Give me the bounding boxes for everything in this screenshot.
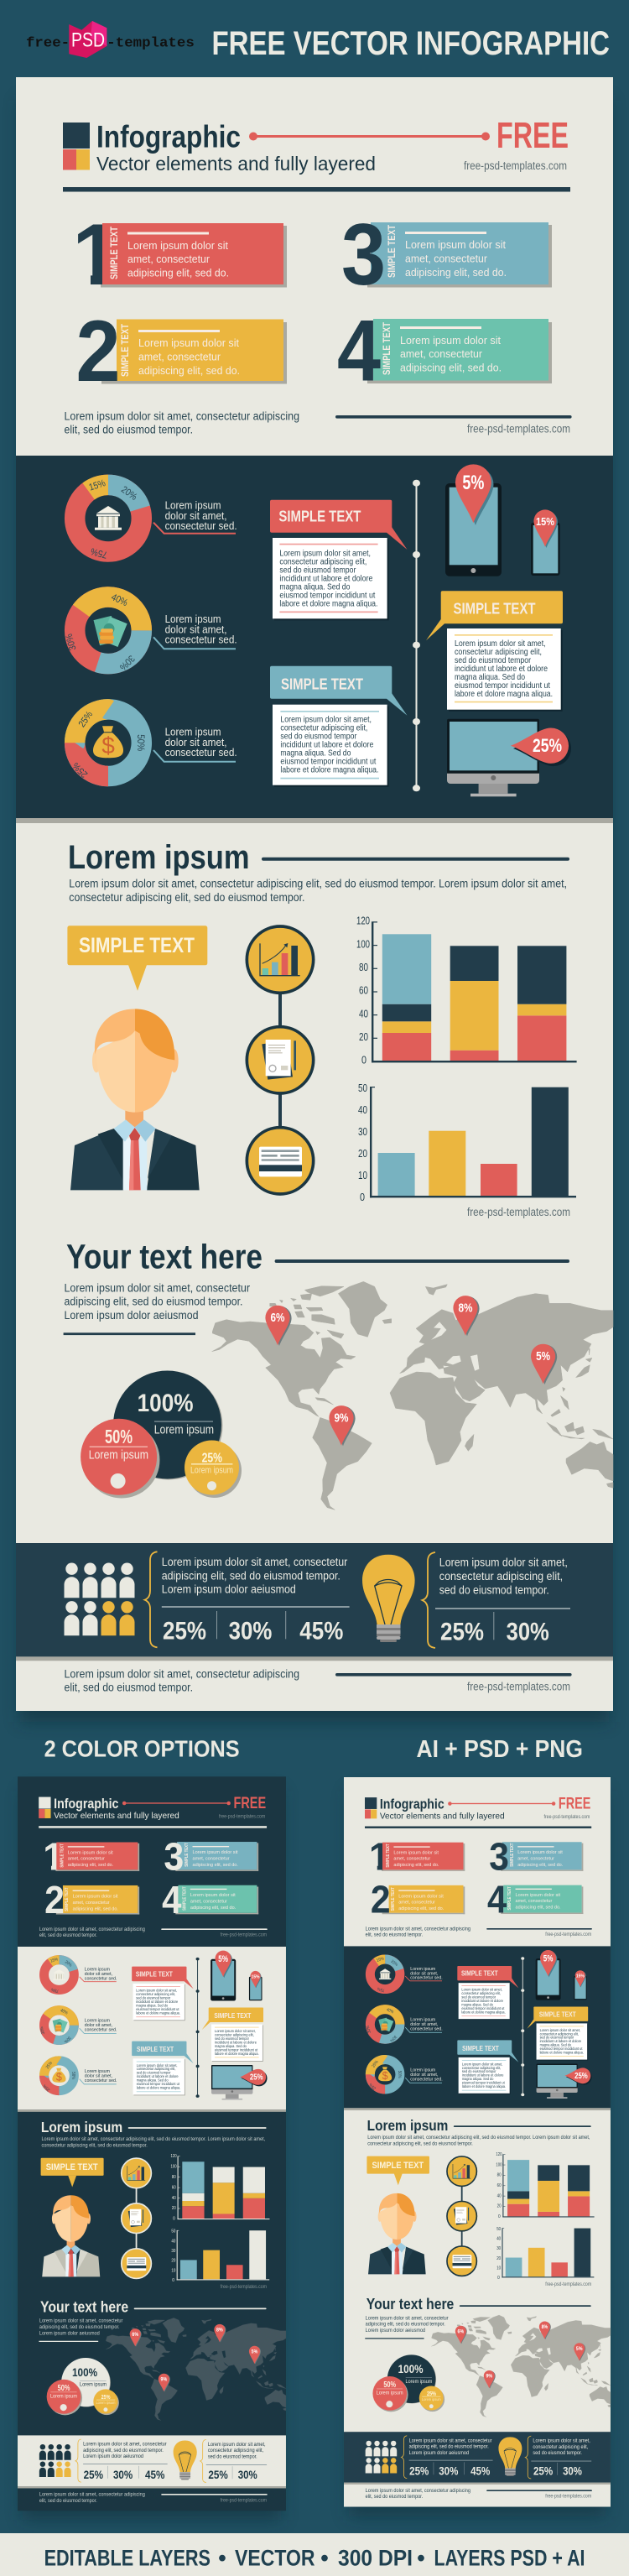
step 4: SIMPLE TEXT (382, 322, 392, 375)
stacked bar chart (356, 915, 577, 1066)
map pin: 5% (531, 1344, 557, 1384)
donut chart 2: 30% (65, 633, 78, 651)
text card: blue: sed do eiusmod tempor (280, 733, 357, 742)
icon: credit card (247, 1128, 314, 1194)
bar chart: 30 (358, 1125, 367, 1138)
map pin: 8% (453, 1296, 480, 1336)
bubble: 25%: 25% (202, 1451, 222, 1465)
section 1 footer: Lorem ipsum dolor sit amet, consectetur adipiscing (64, 409, 299, 423)
text card: yellow: incididunt ut labore et dolore (455, 665, 548, 674)
map description: adipiscing elit, sed do eiusmod tempor. (64, 1296, 243, 1308)
donut label 3: consectetur sed. (165, 746, 237, 759)
donut label 1: Lorem ipsum (165, 499, 221, 512)
page footer (64, 1667, 572, 1694)
icon: desktop monitor: 25% (533, 735, 562, 756)
website: free-psd-templates.com (464, 159, 567, 172)
panel: dark section (16, 456, 613, 823)
callout: yellow: SIMPLE TEXT (453, 600, 536, 618)
stats text right: sed do eiusmod tempor. (439, 1583, 549, 1596)
brace (423, 1552, 435, 1648)
speech bubble (67, 926, 207, 991)
stacked bar chart: 40 (359, 1007, 368, 1020)
icon: light bulb (362, 1555, 415, 1642)
map pin: 9% (329, 1405, 356, 1446)
bubble: 50%: 50% (105, 1426, 133, 1447)
donut chart 1: 15% (88, 478, 107, 493)
heading: AI + PSD + PNG: AI + PSD + PNG (416, 1736, 583, 1763)
map description: Lorem ipsum dolor sit amet, consectetur (64, 1281, 250, 1294)
step 3: Lorem ipsum dolor sit (405, 238, 506, 251)
donut label 1: dolor sit amet, (165, 509, 227, 522)
map pin: 6% (265, 1306, 292, 1346)
map pin: 6%: 6% (270, 1311, 285, 1325)
donut label 3: dolor sit amet, (165, 736, 227, 748)
footer band: • (417, 2546, 425, 2571)
step 2: adipiscing elit, sed do. (138, 364, 240, 377)
stats text left (162, 1556, 350, 1608)
text card: blue: eiusmod tempor incididunt ut (280, 758, 377, 767)
bubble chart (81, 1371, 242, 1499)
icon chain (247, 926, 314, 1194)
page footer: Lorem ipsum dolor sit amet, consectetur adipiscing (64, 1667, 299, 1680)
donut chart 2 (61, 584, 155, 677)
label: FREE: FREE (496, 115, 569, 156)
step 3: adipiscing elit, sed do. (405, 266, 507, 279)
donut label 2 (153, 613, 237, 649)
icon: phone: 15% (536, 516, 554, 528)
thumbnail: light colour option (344, 1777, 611, 2507)
footer band: LAYERS PSD + AI (434, 2546, 585, 2571)
step 1: Lorem ipsum dolor sit (127, 239, 228, 252)
callout: yellow (426, 591, 563, 640)
step 2 (75, 303, 287, 400)
donut chart 2: 30% (117, 653, 136, 672)
bar chart: 10 (358, 1169, 367, 1181)
bubble: 25% (185, 1440, 242, 1498)
bar chart: 40 (358, 1103, 367, 1116)
bubble: 100%: 100% (138, 1390, 194, 1417)
text card: red: eiusmod tempor incididunt ut (279, 591, 376, 600)
donut chart 3: 50% (135, 734, 145, 751)
bubble: 100%: Lorem ipsum (154, 1422, 214, 1437)
step 4: amet, consectetur (400, 347, 483, 360)
icon: tablet: 5% (462, 472, 484, 494)
map pin: 8%: 8% (458, 1301, 473, 1316)
stacked bar chart: 60 (359, 983, 368, 997)
text card: red: Lorem ipsum dolor sit amet, (279, 549, 371, 558)
bubble: 25%: Lorem ipsum (190, 1465, 233, 1475)
text card: red: sed do eiusmod tempor (279, 566, 356, 575)
stats text right: Lorem ipsum dolor sit amet, (439, 1557, 568, 1569)
step 1: 1 (72, 206, 121, 304)
intro paragraph: Lorem ipsum dolor sit amet, consectetur adipiscing elit, sed do eiusmod tempor. Lorem ipsum dolor sit amet, (69, 877, 567, 889)
text card: yellow (447, 628, 563, 712)
donut chart 3 (71, 709, 145, 780)
step 2: 2 (75, 303, 121, 400)
step 2: Lorem ipsum dolor sit (138, 336, 239, 349)
footer band (0, 2533, 629, 2576)
heading: Lorem ipsum: Lorem ipsum (68, 839, 250, 876)
bar chart (358, 1082, 576, 1203)
step 1: amet, consectetur (127, 253, 211, 265)
thumbnail: dark colour option (18, 1776, 286, 2511)
step 1 (72, 206, 287, 304)
icon: money bag: $ (101, 733, 115, 759)
heading: Your text here (66, 1238, 569, 1276)
page footer: free-psd-templates.com (467, 1681, 570, 1693)
page footer: elit, sed do eiusmod tempor. (64, 1682, 193, 1694)
text card: blue: labore et dolore magna aliqua. (280, 766, 378, 775)
stacked bar chart: 20 (359, 1030, 368, 1043)
bubble: 100% (113, 1371, 223, 1480)
panel shadow (20, 101, 609, 1722)
red connector (249, 133, 490, 141)
panel: paper background (16, 77, 613, 1711)
donut label 3: Lorem ipsum (165, 726, 221, 738)
callout: red (270, 500, 408, 550)
icon: people pictogram (64, 1562, 134, 1635)
step 2: amet, consectetur (138, 350, 221, 362)
stats: 25% 30%: 30% (507, 1618, 549, 1645)
step 3 (341, 206, 552, 304)
step 1: adipiscing elit, sed do. (127, 267, 229, 279)
callout: blue (270, 666, 408, 716)
text card: yellow: Lorem ipsum dolor sit amet, (455, 639, 546, 649)
brace (144, 1551, 158, 1647)
subheading: Vector elements and fully layered (96, 153, 376, 175)
panel: stats band (16, 1543, 613, 1661)
text card: red: incididunt ut labore et dolore (279, 574, 373, 583)
donut label 1 (153, 499, 237, 534)
donut chart 1 (61, 472, 155, 565)
footer band: 300 DPI (338, 2546, 413, 2571)
donut chart 3: 25% (71, 760, 90, 780)
stats text left: adipiscing elit, sed do eiusmod tempor. (162, 1569, 340, 1582)
stats: 25% 30% 45%: 30% (229, 1617, 272, 1645)
text card: red (273, 538, 389, 620)
text card: yellow: magna aliqua. Sed do (455, 673, 525, 682)
step 3: amet, consectetur (405, 253, 488, 265)
callout: blue: SIMPLE TEXT (281, 675, 364, 693)
header (63, 115, 569, 175)
timeline (413, 480, 420, 791)
stacked bar chart: 100 (356, 938, 370, 950)
step 4 (337, 302, 552, 399)
text card: yellow: consectetur adipiscing elit, (455, 648, 542, 657)
text card: yellow: eiusmod tempor incididunt ut (455, 681, 550, 691)
text card: blue (273, 705, 389, 787)
footer band: EDITABLE LAYERS (44, 2546, 211, 2571)
step 4: adipiscing elit, sed do. (400, 361, 502, 374)
section 1 footer: elit, sed do eiusmod tempor. (64, 423, 193, 436)
heading: Lorem ipsum (68, 839, 569, 876)
logo: free-PSD-templates: -templates (107, 35, 195, 52)
step 2: SIMPLE TEXT (121, 324, 131, 377)
main infographic (16, 77, 613, 1711)
donut chart 3: 25% (77, 710, 95, 729)
speech bubble: SIMPLE TEXT (79, 934, 195, 957)
text card: blue: Lorem ipsum dolor sit amet, (280, 716, 372, 725)
logo: free-PSD-templates (26, 21, 195, 58)
footer band: VECTOR (235, 2546, 315, 2571)
donut chart 1: 75% (90, 545, 108, 560)
icon: tablet (445, 464, 502, 576)
heading: Infographic: Infographic (96, 120, 241, 154)
donut label 2: dolor sit amet, (165, 623, 227, 636)
stats text right: consectetur adipiscing elit, (439, 1570, 563, 1583)
donut label 3 (153, 726, 237, 762)
text card: blue: consectetur adipiscing elit, (280, 724, 367, 733)
text card: yellow: labore et dolore magna aliqua. (455, 690, 553, 699)
step 4: Lorem ipsum dolor sit (400, 334, 501, 347)
intro paragraph (69, 877, 567, 904)
thumbnail shadows (23, 1791, 606, 2520)
step 4: 4 (337, 302, 381, 399)
text card: blue: magna aliqua. Sed do (280, 749, 351, 759)
bar chart: 20 (358, 1147, 367, 1160)
map pin: 5%: 5% (536, 1349, 550, 1364)
website: free-psd-templates.com (467, 1206, 570, 1218)
bubble: 50%: Lorem ipsum (89, 1448, 148, 1463)
section 1 footer: free-psd-templates.com (467, 423, 570, 435)
intro paragraph: consectetur adipiscing elit, sed do eiusmod tempor. (69, 891, 305, 904)
stats text left: Lorem ipsum dolor sit amet, consectetur (162, 1556, 348, 1568)
stacked bar chart: 80 (359, 961, 368, 973)
icon: growth chart (247, 926, 314, 993)
stats: 25% 30% 45% (163, 1611, 343, 1645)
step 3: 3 (341, 206, 386, 304)
stacked bar chart: 0 (361, 1054, 366, 1066)
map description (64, 1281, 250, 1335)
world map (212, 1281, 613, 1510)
icon: phone (531, 509, 560, 576)
icon: colour squares (63, 123, 90, 169)
stats text right (435, 1557, 570, 1609)
heading: Your text here: Your text here (66, 1238, 263, 1276)
step 3: SIMPLE TEXT (387, 225, 398, 278)
step 1: SIMPLE TEXT (110, 227, 120, 279)
heading: 2 color options: 2 COLOR OPTIONS (44, 1735, 240, 1762)
stats: 25% 30% 45%: 45% (299, 1617, 343, 1645)
stats: 25% 30% (440, 1612, 549, 1645)
stats: 25% 30%: 25% (440, 1618, 484, 1645)
text card: yellow: sed do eiusmod tempor (455, 656, 532, 665)
map pin: 9%: 9% (334, 1411, 349, 1425)
map description: Lorem ipsum dolor aeiusmod (64, 1309, 198, 1322)
callout: red: SIMPLE TEXT (278, 508, 361, 525)
icon: document and pen (247, 1027, 314, 1093)
section 1 footer (64, 409, 572, 436)
text card: red: consectetur adipiscing elit, (279, 557, 366, 566)
stats: 25% 30% 45%: 25% (163, 1617, 206, 1645)
stats text left: Lorem ipsum dolor aeiusmod (162, 1583, 296, 1596)
footer band: • (218, 2546, 226, 2571)
text card: blue: incididunt ut labore et dolore (280, 741, 374, 750)
donut chart 1: 20% (119, 485, 138, 503)
bubble: 50% (81, 1419, 159, 1499)
logo: free-PSD-templates: PSD (71, 29, 105, 52)
donut label 2: Lorem ipsum (165, 613, 221, 625)
donut label 2: consectetur sed. (165, 634, 237, 646)
footer band: • (320, 2546, 329, 2571)
donut chart 2: 40% (110, 592, 129, 608)
icon: desktop monitor (447, 719, 571, 796)
icon: banknotes and coins (94, 616, 127, 647)
bar chart: 0 (360, 1191, 365, 1203)
stacked bar chart: 120 (356, 915, 370, 926)
logo: free-PSD-templates: free- (26, 35, 70, 52)
text card: red: magna aliqua. Sed do (279, 582, 351, 592)
text card: red: labore et dolore magna aliqua. (279, 599, 377, 608)
bar chart: 50 (358, 1082, 367, 1094)
icon: bank (95, 506, 122, 530)
illustration: businessman (70, 1009, 200, 1190)
donut label 1: consectetur sed. (165, 519, 237, 532)
